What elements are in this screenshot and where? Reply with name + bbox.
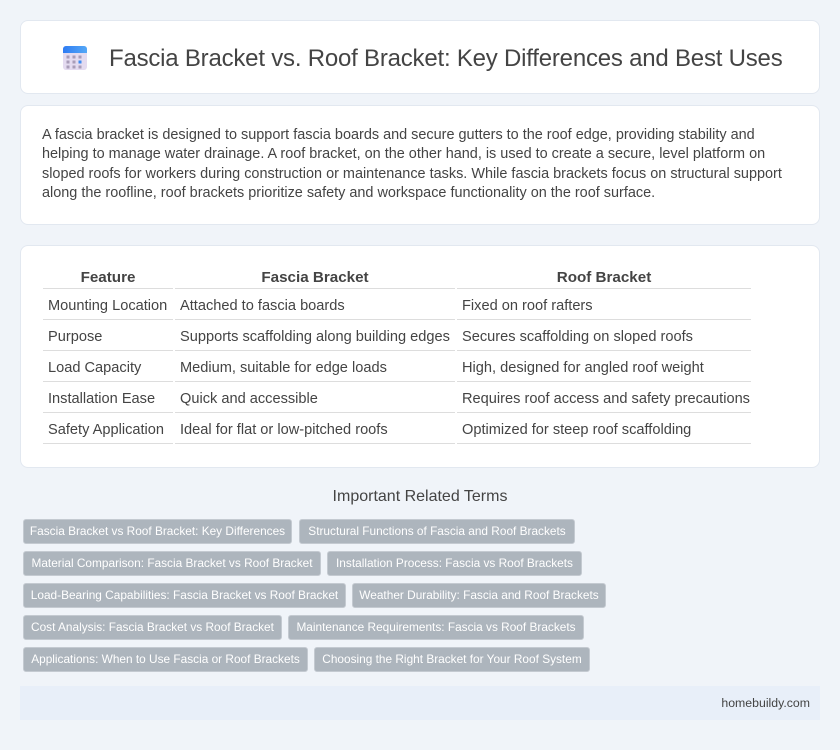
- title: Fascia Bracket vs. Roof Bracket: Key Differences and Best Uses: [109, 45, 782, 72]
- tag list: Structural Functions of Fascia and Roof Brackets: [308, 524, 566, 538]
- text block: intro: helping to manage water drainage. A roof bracket, on the other hand, is used to create a secure, level platform on: [42, 146, 765, 162]
- table: comparison: Attached to fascia boards: [180, 298, 345, 314]
- panel: header: [20, 20, 820, 94]
- table: comparison: Roof Bracket: [557, 269, 651, 286]
- text block: intro: sloped roofs for workers during construction or maintenance tasks. While fascia brackets focus on structural support: [42, 166, 782, 182]
- table: comparison: [43, 269, 751, 444]
- tag list: Weather Durability: Fascia and Roof Brackets: [359, 588, 599, 602]
- tag list: Choosing the Right Bracket for Your Roof System: [322, 652, 582, 666]
- heading: related terms: Important Related Terms: [333, 488, 507, 505]
- footer: [20, 686, 820, 720]
- tag list: Fascia Bracket vs Roof Bracket: Key Differences: [30, 524, 285, 538]
- table: comparison: Mounting Location: [48, 298, 167, 314]
- table: comparison: Supports scaffolding along building edges: [180, 329, 450, 345]
- table: comparison: Ideal for flat or low-pitched roofs: [180, 422, 388, 438]
- icon: calendar: [63, 46, 87, 70]
- table: comparison: Fascia Bracket: [261, 269, 369, 286]
- tag list: Installation Process: Fascia vs Roof Brackets: [336, 556, 573, 570]
- tag list: Load-Bearing Capabilities: Fascia Bracket vs Roof Bracket: [31, 588, 338, 602]
- table: comparison: Requires roof access and safety precautions: [462, 391, 750, 407]
- tag list: [23, 519, 606, 672]
- text block: intro: [42, 127, 782, 201]
- table: comparison: Purpose: [48, 329, 102, 345]
- table: comparison: Secures scaffolding on sloped roofs: [462, 329, 693, 345]
- table: comparison: Feature: [81, 269, 135, 286]
- table: comparison: High, designed for angled roof weight: [462, 360, 704, 376]
- table: comparison: Quick and accessible: [180, 391, 318, 407]
- text block: intro: A fascia bracket is designed to support fascia boards and secure gutters to the roof edge, providing stability and: [42, 127, 755, 143]
- table: comparison: Medium, suitable for edge loads: [180, 360, 387, 376]
- footer text: source: homebuildy.com: [721, 696, 810, 710]
- table: comparison: Fixed on roof rafters: [462, 298, 593, 314]
- table: comparison: Load Capacity: [48, 360, 141, 376]
- text block: intro: along the roofline, roof brackets prioritize safety and workspace functionality on the roof surface.: [42, 185, 655, 201]
- panel: comparison table: [20, 245, 820, 468]
- tag list: Applications: When to Use Fascia or Roof Brackets: [31, 652, 300, 666]
- table: comparison: Optimized for steep roof scaffolding: [462, 422, 691, 438]
- table: comparison: Installation Ease: [48, 391, 155, 407]
- tag list: Material Comparison: Fascia Bracket vs Roof Bracket: [31, 556, 313, 570]
- panel: intro: [20, 105, 820, 225]
- table: comparison: Safety Application: [48, 422, 164, 438]
- tag list: Cost Analysis: Fascia Bracket vs Roof Bracket: [31, 620, 274, 634]
- tag list: Maintenance Requirements: Fascia vs Roof Brackets: [296, 620, 576, 634]
